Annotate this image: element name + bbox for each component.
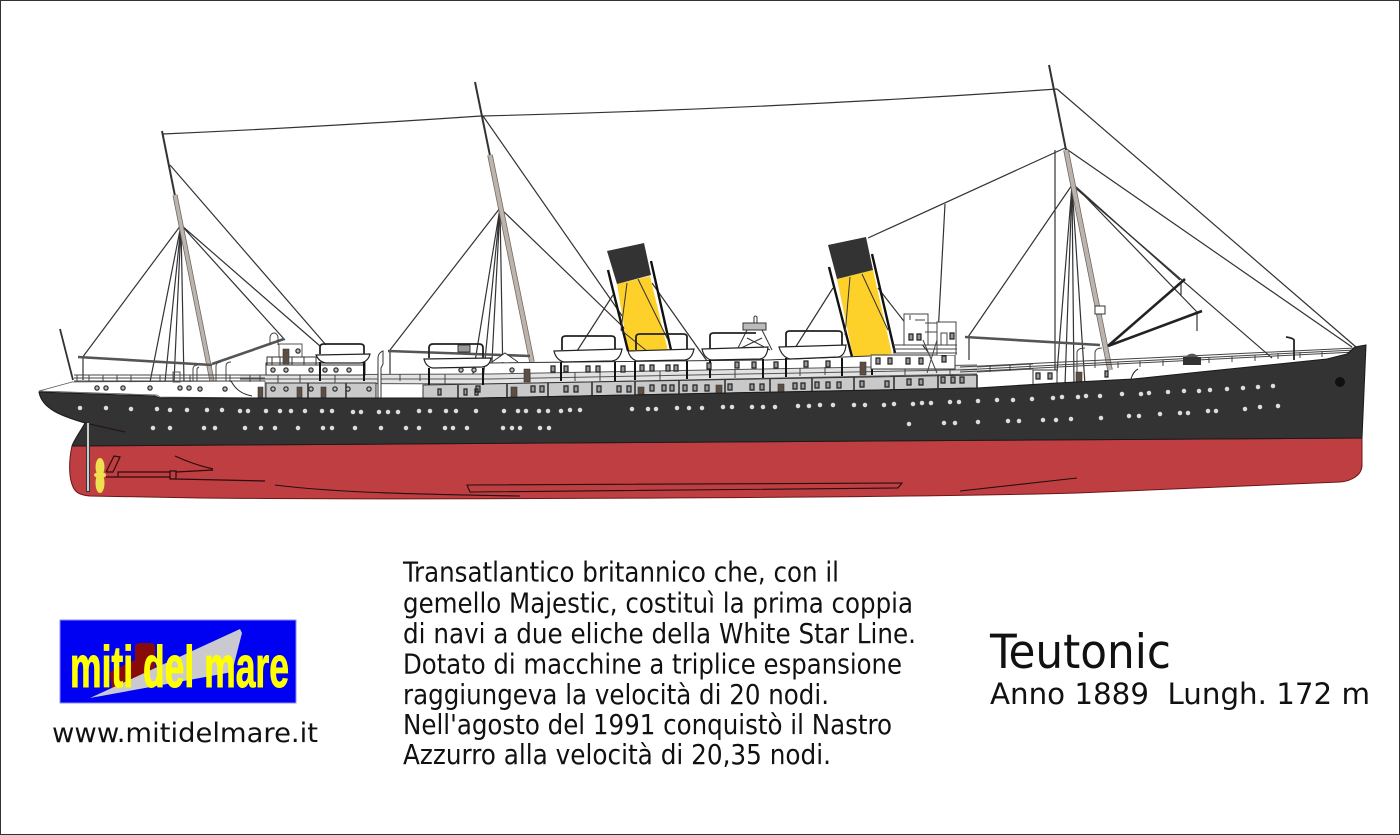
round cabin ports on aft houses — [97, 351, 512, 389]
hull: red underbody — [70, 438, 1362, 499]
funnel: aft — [607, 243, 671, 352]
deck rails and ventilators — [74, 333, 1355, 398]
propeller shaft and bracket — [106, 456, 265, 481]
description text block: Transatlantico britannico che, con il — [402, 556, 839, 588]
masts and booms — [78, 65, 1202, 381]
description text block: Nell'agosto del 1991 conquistò il Nastro — [403, 709, 892, 741]
description text block — [402, 556, 916, 771]
superstructure decks — [240, 314, 1057, 398]
poop deck white band — [39, 381, 265, 398]
cabin windows — [438, 333, 1108, 395]
portholes — [80, 386, 1278, 428]
hull: black topsides — [39, 345, 1366, 446]
logo: miti del mare — [60, 620, 296, 703]
hawse hole — [1335, 377, 1345, 387]
rigging and stays — [60, 89, 1356, 385]
description text block: Azzurro alla velocità di 20,35 nodi. — [403, 739, 831, 771]
website url: www.mitidelmare.it — [52, 718, 318, 749]
description text block: di navi a due eliche della White Star Line. — [403, 618, 916, 650]
lifeboats — [316, 331, 846, 368]
propeller — [94, 458, 106, 493]
rudder post — [86, 423, 90, 492]
ship name: Teutonic — [989, 625, 1171, 680]
funnel: forward — [828, 237, 895, 357]
description text block: raggiungeva la velocità di 20 nodi. — [403, 679, 829, 711]
description text block: Dotato di macchine a triplice espansione — [403, 648, 902, 680]
ship illustration: Teutonic — [39, 65, 1366, 499]
logo: miti del mare: miti del mare — [70, 635, 289, 700]
cabin doors — [258, 349, 1082, 398]
hull detail lines — [85, 423, 1077, 496]
description text block: gemello Majestic, costituì la prima coppia — [403, 588, 913, 620]
year and length: Anno 1889 Lungh. 172 m — [990, 677, 1370, 711]
